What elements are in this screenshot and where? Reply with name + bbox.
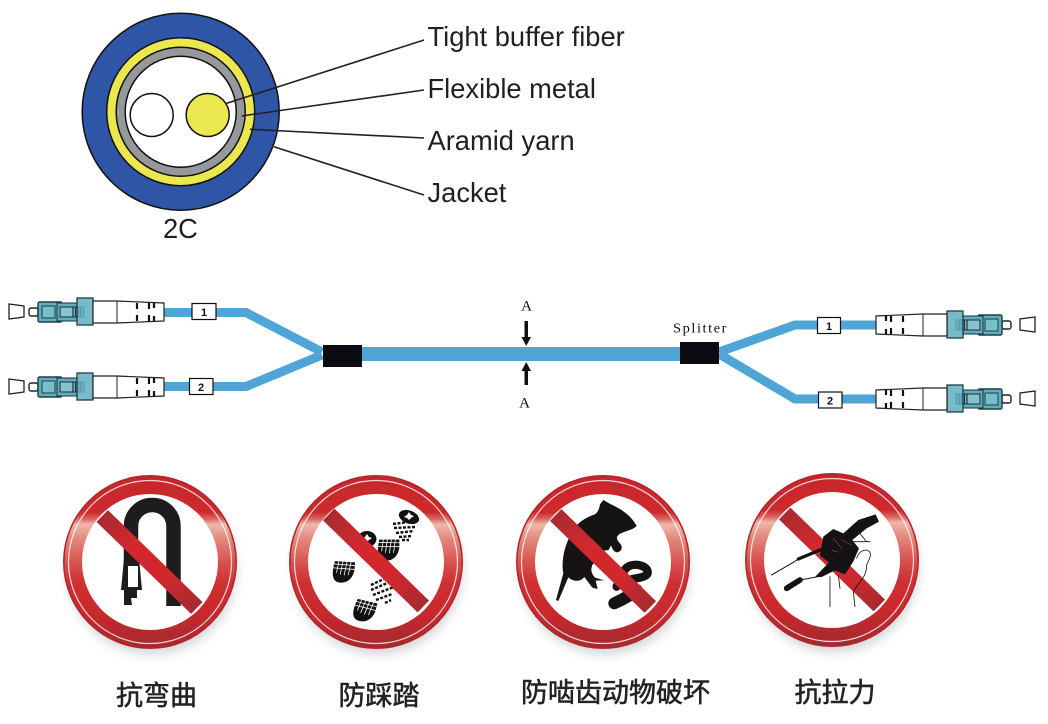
prohibition bar [779, 508, 885, 611]
label box: left 2: 2 [198, 382, 204, 394]
label: flexible metal: Flexible metal [428, 73, 596, 104]
section mark top: A [521, 298, 532, 314]
label: jacket: Jacket [428, 177, 507, 208]
label box: left 1 [192, 304, 216, 320]
icon: no stepping [289, 475, 463, 655]
connector: right 2 [876, 385, 1035, 412]
section mark bottom: A [519, 396, 530, 412]
left splitter [323, 345, 362, 367]
diagram: fiber cable with splitters [9, 298, 1035, 412]
label box: right 1: 1 [826, 321, 832, 333]
splitter label: Splitter [673, 322, 728, 336]
label box: right 2 [818, 392, 842, 408]
leader lines [227, 40, 424, 195]
jacket layer [82, 13, 279, 210]
panel: cable cross-section [82, 13, 279, 210]
flexible metal layer [116, 47, 245, 176]
tight buffer fiber [186, 94, 229, 136]
label box: left 1: 1 [201, 307, 207, 319]
label: 2C: 2C [163, 213, 198, 244]
caption: anti-pull: 抗拉力 [794, 678, 876, 708]
label box: left 2 [190, 378, 213, 394]
cable lines [164, 312, 876, 399]
right splitter [680, 342, 719, 364]
rat and chewed cable [556, 500, 648, 603]
label box: right 2: 2 [827, 396, 833, 408]
icon: no bending [63, 475, 237, 655]
prohibition bar [96, 510, 203, 614]
label box: right 1 [818, 318, 840, 334]
prohibition bar [550, 509, 656, 613]
caption: anti-rodent: 防啮齿动物破坏 [521, 678, 710, 708]
label: tight buffer fiber: Tight buffer fiber [428, 21, 625, 52]
icon: no rodent damage [516, 475, 690, 655]
prohibition bar [323, 509, 429, 612]
arrow down [522, 321, 531, 346]
bent cable [121, 505, 174, 606]
icon: no pulling [745, 473, 919, 653]
connector: left 1 [9, 298, 164, 325]
connector: right 1 [876, 311, 1035, 338]
inner space [125, 56, 236, 167]
label: aramid yarn: Aramid yarn [428, 125, 575, 156]
connector: left 2 [9, 373, 164, 400]
footprints [330, 507, 421, 626]
empty fiber [130, 94, 173, 136]
caption: anti-bending: 抗弯曲 [116, 681, 197, 711]
arrow up [522, 362, 531, 385]
caption: anti-trampling: 防踩踏 [338, 681, 420, 711]
aramid yarn layer [107, 38, 255, 186]
hand pulling cable [772, 514, 879, 607]
